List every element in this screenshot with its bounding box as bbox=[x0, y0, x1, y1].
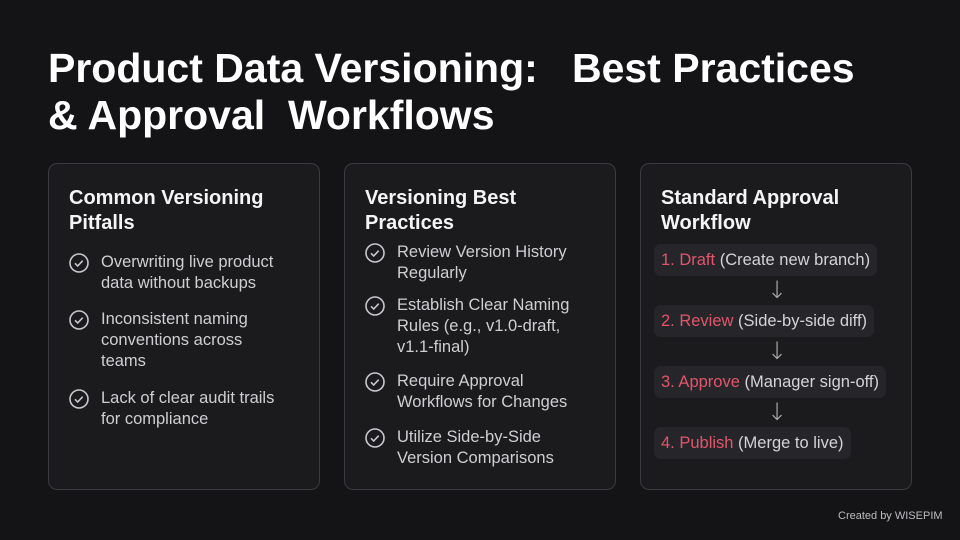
item 3: Lack of clear audit trails bbox=[101, 389, 274, 407]
heading: pitfalls bbox=[69, 187, 263, 234]
step 1 bbox=[654, 244, 877, 276]
title: Product Data Versioning: Best Practices & Approval Workflows bbox=[48, 45, 855, 138]
item 2: Rules (e.g., v1.0-draft, bbox=[397, 317, 560, 335]
item 3: for compliance bbox=[101, 410, 208, 428]
item 2: v1.1-final) bbox=[397, 338, 469, 356]
heading: workflow: Standard Approval bbox=[661, 187, 839, 209]
heading: workflow: Workflow bbox=[661, 212, 751, 234]
item 4: Utilize Side-by-Side bbox=[397, 428, 541, 446]
item 2: conventions across bbox=[101, 331, 242, 349]
panel: best practices bbox=[344, 163, 616, 490]
step 3: 3. Approve (Manager sign-off) bbox=[661, 373, 879, 391]
step 3 bbox=[654, 366, 886, 398]
item 2: Inconsistent naming bbox=[101, 310, 248, 328]
arrow 2: ↓ bbox=[767, 337, 787, 365]
item 3 bbox=[69, 389, 274, 428]
item 4: Version Comparisons bbox=[397, 449, 554, 467]
panel: approval workflow bbox=[640, 163, 912, 490]
item 1: Regularly bbox=[397, 264, 467, 282]
item 4 bbox=[365, 428, 554, 467]
heading: best practices: Versioning Best bbox=[365, 187, 516, 209]
heading: workflow bbox=[661, 187, 839, 234]
item 1 bbox=[69, 253, 274, 292]
footer credit: Created by WISEPIM bbox=[838, 510, 943, 522]
item 2: Establish Clear Naming bbox=[397, 296, 569, 314]
step 2: 2. Review (Side-by-side diff) bbox=[661, 312, 867, 330]
heading: best practices bbox=[365, 187, 516, 234]
arrow 1: ↓ bbox=[767, 276, 787, 304]
item 3: Workflows for Changes bbox=[397, 393, 567, 411]
item 3 bbox=[365, 372, 567, 411]
panel: pitfalls bbox=[48, 163, 320, 490]
step 4 bbox=[654, 427, 850, 459]
arrow 3: ↓ bbox=[767, 398, 787, 426]
item 1: Review Version History bbox=[397, 243, 567, 261]
heading: pitfalls: Common Versioning bbox=[69, 187, 263, 209]
item 1: data without backups bbox=[101, 274, 256, 292]
heading: best practices: Practices bbox=[365, 212, 454, 234]
item 1: Overwriting live product bbox=[101, 253, 273, 271]
item 2 bbox=[365, 296, 569, 356]
step 2 bbox=[654, 305, 874, 337]
item 3: Require Approval bbox=[397, 372, 524, 390]
step 1: 1. Draft (Create new branch) bbox=[661, 251, 870, 269]
heading: pitfalls: Pitfalls bbox=[69, 212, 135, 234]
step 4: 4. Publish (Merge to live) bbox=[661, 434, 844, 452]
item 2 bbox=[69, 310, 248, 370]
item 1 bbox=[365, 243, 567, 282]
item 2: teams bbox=[101, 352, 146, 370]
